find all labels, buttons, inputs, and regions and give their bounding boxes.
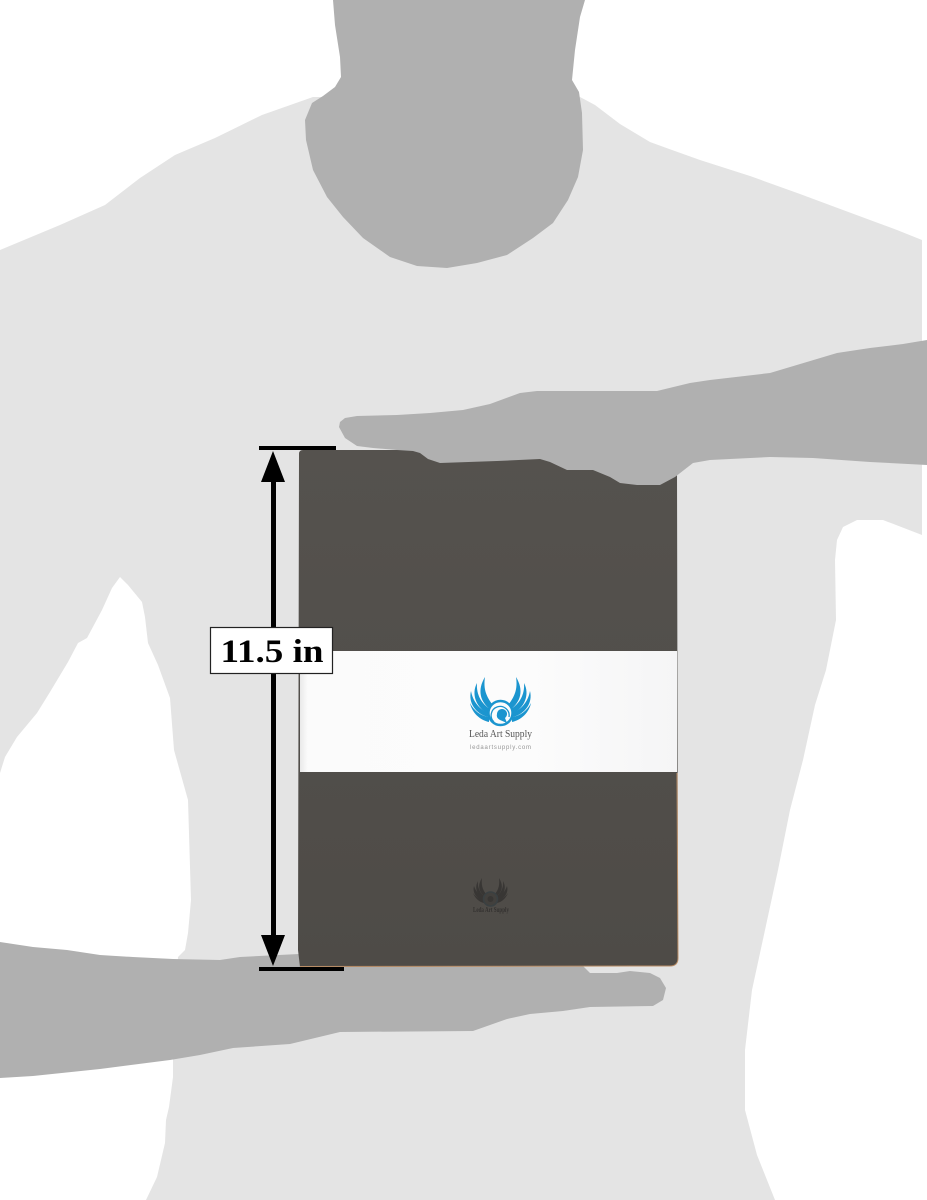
dimension label [210,628,332,674]
label box [210,628,332,674]
logo name: Leda Art Supply [469,729,533,740]
top arrowhead [261,451,285,482]
emblem swirl [497,709,507,723]
top tick [259,446,336,450]
lower hand silhouette [0,942,666,1078]
bottom arrowhead [261,935,285,966]
arrow shaft [271,480,276,938]
right wing [509,677,531,722]
upper hand silhouette [339,340,927,485]
logo url: ledaartsupply.com [470,745,531,751]
dimension arrow: 11.5 in [259,446,344,971]
paper band [300,651,677,772]
embossed right wing [495,878,508,903]
notebook edge highlight [300,773,678,966]
logo: blue winged emblem [470,677,531,725]
notebook cover [298,450,678,967]
label text: 11.5 in [220,634,324,670]
head and neck silhouette [305,0,585,268]
notebook [298,450,678,967]
bottom tick [259,967,344,971]
embossed logo on cover [473,878,509,914]
left wing [470,677,492,722]
embossed swirl [488,896,494,902]
embossed ring [484,892,498,906]
embossed name: Leda Art Supply [473,906,509,914]
emblem inner ring [491,706,509,722]
embossed left wing [473,878,486,903]
emblem ring [488,701,512,725]
